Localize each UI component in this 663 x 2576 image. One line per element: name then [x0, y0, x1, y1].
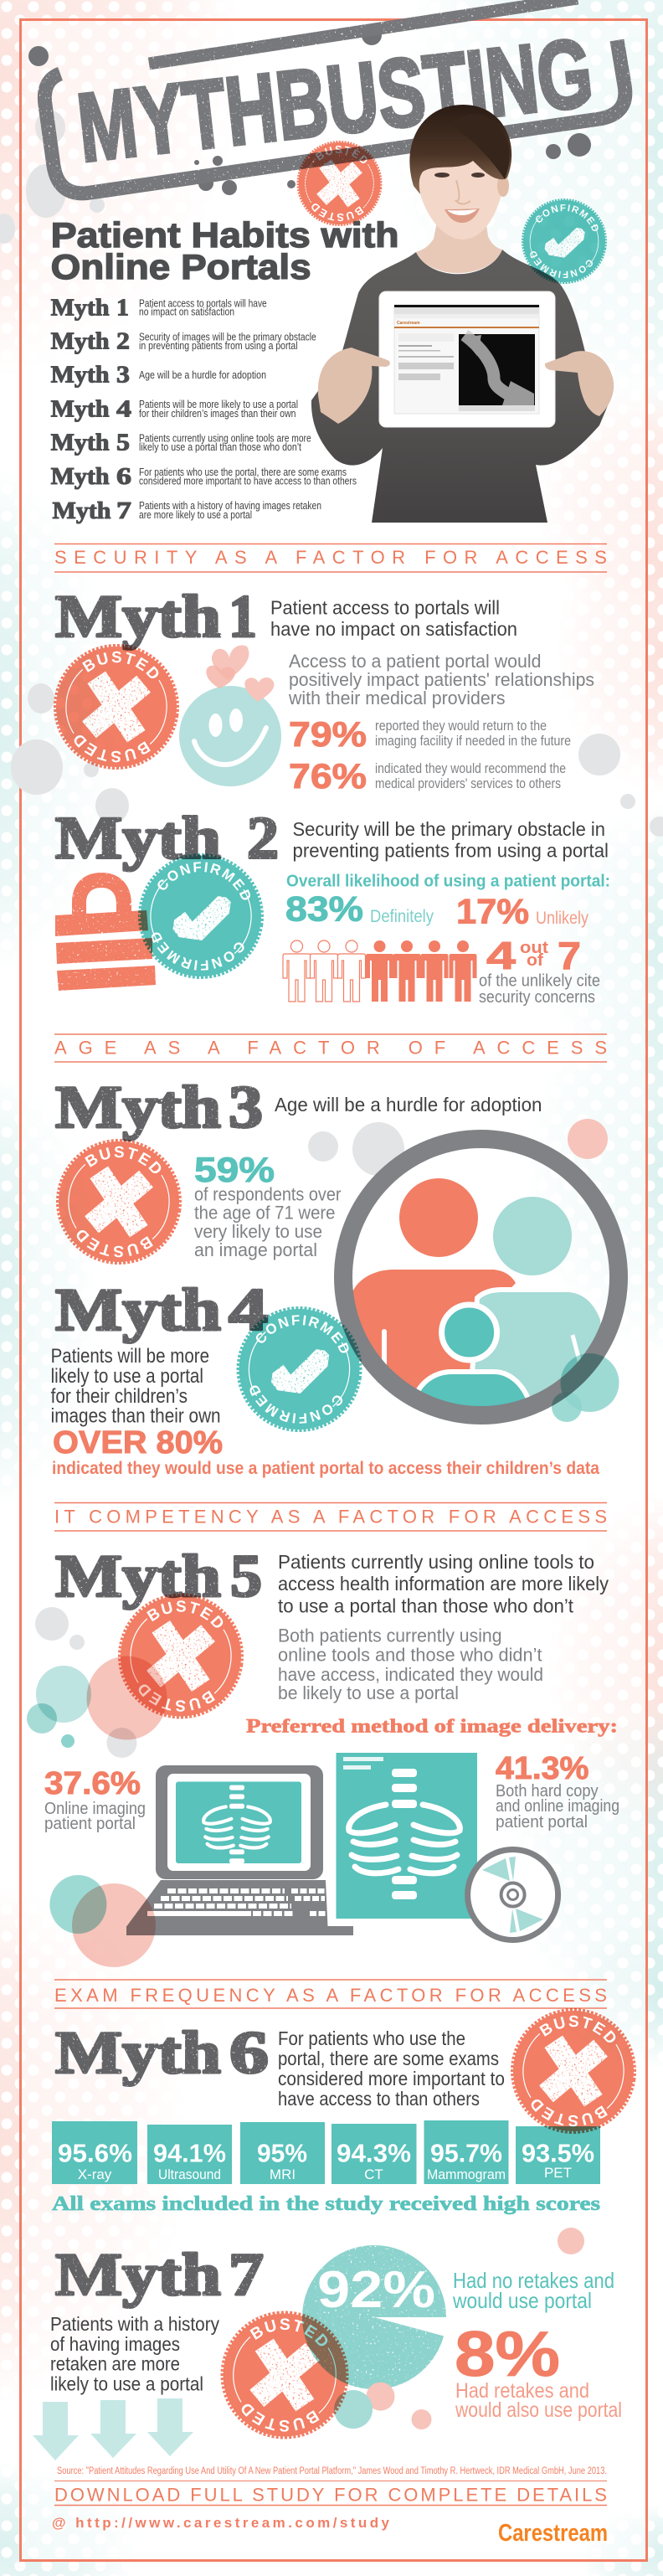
tile: ultrasound: 94.1%	[153, 2139, 226, 2167]
myth 5 statement: to use a portal than those who don’t	[278, 1595, 574, 1617]
myth 2	[55, 805, 610, 1007]
sweater	[311, 250, 613, 523]
teal parent	[493, 1197, 572, 1275]
tile: PET	[516, 2126, 600, 2184]
busted stamp: hero	[296, 141, 382, 226]
myth list: 1	[116, 294, 129, 321]
busted stamp: myth 7: BUSTED	[249, 2318, 328, 2347]
confirmed stamp: myth 2: CONFIRMED	[152, 933, 244, 971]
tile: CT	[332, 2124, 417, 2184]
stat: 41.3 percent: patient portal	[496, 1813, 588, 1832]
legend: no retakes: would use portal	[452, 2288, 592, 2313]
stat: 37.6 percent: Online imaging	[44, 1800, 146, 1818]
stat: 59 percent	[194, 1150, 342, 1260]
tile: mammogram: 95.7%	[430, 2139, 502, 2167]
stat: 59 percent: 59%	[194, 1150, 275, 1189]
stat: 4 out of 7: 7	[558, 934, 581, 977]
busted stamp: hero: BUSTED	[315, 146, 367, 163]
busted stamp: myth 1	[54, 644, 179, 770]
busted stamp: myth 1: BUSTED	[74, 735, 151, 762]
tablet screen	[394, 305, 539, 414]
myth 2 statement: Security will be the primary obstacle in	[293, 818, 605, 840]
myth list: 6	[116, 463, 131, 490]
stat: 59 percent: an image portal	[194, 1239, 317, 1260]
supporting paragraph: have access, indicated they would	[278, 1664, 543, 1685]
stat: over 80 percent	[52, 1425, 599, 1478]
stat: 8 percent: Had retakes and	[455, 2379, 589, 2403]
neck and chest	[416, 219, 502, 273]
myth 4 statement	[51, 1345, 221, 1428]
stat: 41.3 percent: Both hard copy	[496, 1782, 599, 1801]
myth 1 statement: have no impact on satisfaction	[270, 618, 517, 640]
myth 6 title: 6	[229, 2019, 269, 2086]
myth list: for their children’s images than their own	[139, 408, 296, 420]
myth 2 title	[55, 805, 279, 872]
myth 6 statement	[278, 2027, 505, 2110]
supporting paragraph	[288, 651, 594, 708]
exam score tiles	[52, 2120, 600, 2184]
busted stamp: myth 5	[118, 1593, 244, 1718]
busted stamp: myth 5: BUSTED	[146, 1600, 223, 1628]
busted stamp: myth 6: BUSTED	[539, 2015, 616, 2043]
eyes and brows	[434, 173, 450, 178]
busted stamp: myth 3: BUSTED	[77, 1230, 153, 1258]
busted stamp: myth 6	[511, 2008, 636, 2134]
stat: 4 out of 7: security concerns	[479, 988, 595, 1007]
myth 5 title: Myth	[55, 1543, 221, 1610]
stat: 4 out of 7: of	[527, 951, 543, 970]
tile: ultrasound: Ultrasound	[158, 2166, 221, 2182]
myth 2 statement	[293, 818, 609, 862]
myth 1 statement: Patient access to portals will	[270, 597, 500, 619]
bubbles	[334, 2228, 584, 2429]
myth 1 title: Myth	[55, 583, 221, 650]
stat: 83 percent: Definitely	[370, 907, 434, 926]
stat: 41.3 percent	[496, 1751, 619, 1832]
decorative grey blobs	[0, 25, 663, 837]
bubbles behind family	[308, 1119, 608, 1176]
footer call to action: DOWNLOAD FULL STUDY FOR COMPLETE DETAILS	[54, 2485, 607, 2506]
stat: 59 percent: the age of 71 were	[194, 1203, 335, 1224]
confirmed stamp: myth 4	[236, 1306, 362, 1432]
confirmed stamp: myth 2	[138, 853, 264, 979]
icon: family in magnifier circle	[335, 1139, 619, 1424]
stat: 59 percent: very likely to use	[194, 1221, 322, 1242]
heading: patient habits	[51, 215, 399, 286]
supporting paragraph: Both patients currently using	[278, 1625, 502, 1646]
confirmed stamp: hero	[522, 198, 607, 284]
myth 7 title	[55, 2241, 264, 2308]
supporting paragraph	[278, 1625, 543, 1703]
stat: 79 percent: imaging facility if needed in the future	[375, 733, 571, 749]
supporting paragraph: online tools and those who didn’t	[278, 1645, 542, 1666]
myth 7 statement: of having images	[50, 2333, 180, 2355]
myth 4 title: 4	[229, 1276, 268, 1343]
supporting paragraph: Access to a patient portal would	[289, 651, 541, 672]
hero woman holding tablet	[311, 105, 614, 523]
myth 4 title	[55, 1276, 268, 1343]
stat: 37.6 percent	[44, 1766, 146, 1833]
tile: PET: PET	[544, 2165, 572, 2181]
right hand	[545, 351, 614, 416]
stat: 37.6 percent: 37.6%	[44, 1766, 141, 1801]
myth 7 statement: likely to use a portal	[50, 2373, 203, 2395]
myth list: Myth	[51, 328, 110, 355]
myth 6 statement: considered more important to	[278, 2068, 505, 2089]
myth 6	[52, 2008, 636, 2215]
stat: 83 percent: 83%	[285, 889, 363, 929]
myth 6 statement: portal, there are some exams	[278, 2048, 499, 2069]
stat: 4 out of 7: out	[520, 939, 548, 957]
supporting paragraph: with their medical providers	[288, 688, 506, 708]
myth list: Patient access to portals will have	[139, 297, 267, 309]
busted stamp: myth 7	[221, 2311, 348, 2439]
myth list: considered more important to have access to than others	[139, 476, 357, 487]
myth 3 statement: Age will be a hurdle for adoption	[275, 1094, 542, 1115]
myth list: Myth	[51, 463, 110, 490]
icon: CD disc	[468, 1849, 558, 1940]
myth list: 7	[116, 497, 131, 524]
myth 5 bubbles	[27, 1607, 167, 1758]
myth 5 title	[55, 1543, 262, 1610]
stat: 4 out of 7	[479, 934, 600, 1007]
myth 1 title	[55, 583, 257, 650]
myth 5 statement: Patients currently using online tools to	[278, 1551, 594, 1573]
myth list: 3	[116, 362, 130, 389]
hair	[409, 105, 511, 194]
icon: padlock	[55, 873, 156, 991]
tile: mammogram: Mammogram	[427, 2166, 506, 2182]
stat: 17 percent: Unlikely	[536, 909, 588, 928]
tile: x-ray	[52, 2121, 137, 2184]
stat: over 80 percent: indicated they would use a patient portal to access their children’s data	[52, 1459, 599, 1478]
myth list: in preventing patients from using a portal	[139, 340, 298, 352]
myth 7 statement: Patients with a history	[50, 2313, 219, 2335]
myth 5 statement: access health information are more likely	[278, 1573, 609, 1595]
myth 1 title: 1	[229, 583, 257, 650]
myth list: 5	[116, 430, 130, 456]
heading: patient habits: Patient Habits with	[51, 215, 399, 255]
tile: CT: 94.3%	[337, 2139, 411, 2167]
busted stamp: myth 3	[56, 1139, 182, 1265]
study url: @ http://www.carestream.com/study	[52, 2515, 390, 2531]
supporting paragraph: be likely to use a portal	[278, 1682, 459, 1703]
heading: patient habits: Online Portals	[51, 247, 311, 286]
tile: CT: CT	[364, 2166, 383, 2182]
busted stamp: myth 7: BUSTED	[241, 2403, 320, 2432]
legend: no retakes	[452, 2268, 614, 2313]
section header: exam frequency: EXAM FREQUENCY AS A FACTOR FOR ACCESS	[54, 1985, 607, 2006]
confirmed stamp: myth 4: CONFIRMED	[249, 1385, 343, 1424]
myth list: Myth	[51, 294, 110, 321]
orange parent	[399, 1178, 478, 1257]
myth 5 title: 5	[230, 1543, 262, 1610]
myth 4 statement: images than their own	[51, 1405, 221, 1428]
stat: 41.3 percent: 41.3%	[496, 1751, 589, 1786]
tile: MRI: 95%	[257, 2139, 307, 2167]
confirmed stamp: myth 2: CONFIRMED	[157, 862, 250, 899]
confirmed stamp: hero: CONFIRMED	[536, 204, 599, 231]
myth 6 title	[55, 2019, 269, 2086]
myth 2 title: Myth	[55, 805, 221, 872]
stat: 76 percent	[289, 756, 566, 796]
myth 3 title: 3	[229, 1074, 263, 1141]
section header: IT competency: IT COMPETENCY AS A FACTOR FOR ACCESS	[54, 1507, 607, 1528]
myth 3 title: Myth	[55, 1074, 221, 1141]
tile: PET: 93.5%	[522, 2139, 594, 2167]
tile: MRI: MRI	[270, 2166, 296, 2182]
myth 1	[54, 583, 594, 796]
left hand	[318, 348, 390, 424]
myth 7 title: 7	[229, 2241, 264, 2308]
myth list: Myth	[51, 395, 110, 422]
myth list: Age will be a hurdle for adoption	[139, 369, 266, 381]
icon: x-ray film	[337, 1753, 477, 1919]
myth 4 title: Myth	[55, 1276, 221, 1343]
myth list: 2	[116, 328, 130, 355]
stat: 79 percent: reported they would return to the	[375, 718, 547, 734]
confirmed stamp: hero: CONFIRMED	[530, 251, 593, 278]
stat: 76 percent: indicated they would recommend the	[375, 760, 566, 776]
myth 7 title: Myth	[55, 2241, 221, 2308]
myth list	[51, 294, 357, 524]
nose	[456, 180, 470, 204]
myth list: are more likely to use a portal	[139, 509, 252, 521]
busted stamp: myth 5: BUSTED	[139, 1685, 215, 1712]
myth 5	[44, 1543, 619, 1967]
mouth	[445, 209, 480, 223]
busted stamp: hero: BUSTED	[311, 204, 363, 221]
myth 6 statement: For patients who use the	[278, 2027, 465, 2049]
myth 4 statement: for their children’s	[51, 1385, 188, 1408]
bubble over laptop	[72, 1883, 156, 1967]
myth 5 statement	[278, 1551, 609, 1617]
people icons: 3 outline, 4 solid	[283, 940, 477, 1002]
busted stamp: myth 3: BUSTED	[85, 1146, 161, 1173]
tile: mammogram	[424, 2120, 509, 2184]
myth list: Myth	[51, 362, 110, 389]
stat: 4 out of 7: of the unlikely cite	[479, 971, 600, 990]
stat: 41.3 percent: and online imaging	[496, 1797, 619, 1816]
stat: 76 percent: medical providers' services to others	[375, 775, 561, 791]
icon: smiley with hearts	[179, 646, 281, 786]
child	[416, 1369, 530, 1406]
busted stamp: myth 6: BUSTED	[531, 2099, 608, 2127]
confirmed stamp: myth 4: CONFIRMED	[256, 1315, 348, 1353]
myth 6 title: Myth	[55, 2019, 221, 2086]
myth 4	[50, 1276, 599, 1478]
myth 7 statement	[50, 2313, 219, 2395]
face	[416, 131, 506, 240]
pie chart: 92 and 8 percent: 92%	[317, 2261, 435, 2319]
stat: 83 percent	[285, 889, 434, 929]
stat: 79 percent: 79%	[289, 714, 367, 754]
myth list: Patients will be more likely to use a portal	[139, 399, 298, 410]
myth 4 statement: likely to use a portal	[51, 1365, 203, 1388]
stat: 76 percent: 76%	[289, 756, 367, 796]
down arrows	[33, 2398, 193, 2460]
tile: MRI	[240, 2122, 325, 2184]
tablet screen: Carestream	[397, 321, 420, 326]
tablet	[379, 291, 555, 427]
bubbles over family	[552, 1353, 619, 1422]
tile: x-ray: 95.6%	[58, 2139, 132, 2167]
myth 4 statement: Patients will be more	[51, 1345, 209, 1368]
stat: over 80 percent: OVER 80%	[53, 1425, 223, 1461]
likelihood heading: Overall likelihood of using a patient portal:	[286, 873, 610, 891]
stat: 59 percent: of respondents over	[194, 1184, 342, 1205]
myth list: Patients currently using online tools are more	[139, 432, 311, 444]
myth 7	[33, 2228, 622, 2460]
pie chart: 92 and 8 percent	[302, 2245, 448, 2389]
stat: 79 percent	[289, 714, 571, 754]
bubble behind laptop	[49, 1875, 106, 1934]
preferred delivery heading: Preferred method of image delivery:	[246, 1716, 618, 1737]
tile: ultrasound	[147, 2125, 232, 2184]
myth 3 title	[55, 1074, 263, 1141]
section header: age: AGE AS A FACTOR OF ACCESS	[54, 1038, 607, 1059]
Carestream logo: Carestream	[498, 2520, 608, 2547]
myth list: likely to use a portal than those who don’t	[139, 441, 301, 453]
myth 2 statement: preventing patients from using a portal	[293, 840, 609, 862]
tile: x-ray: X-ray	[78, 2166, 112, 2182]
icon: laptop with x-ray	[126, 1765, 353, 1935]
stat: 37.6 percent: patient portal	[44, 1815, 136, 1833]
busted stamp: myth 1: BUSTED	[82, 652, 159, 678]
myth 6 statement: have access to than others	[278, 2088, 480, 2110]
stat: 8 percent: would also use portal	[455, 2398, 622, 2422]
ear	[497, 175, 509, 197]
myth 7 statement: retaken are more	[50, 2353, 180, 2375]
stat: 8 percent	[455, 2319, 622, 2422]
stat: 4 out of 7: 4	[486, 934, 517, 977]
myth list: 4	[116, 395, 131, 422]
exams note: All exams included in the study received high scores	[52, 2193, 600, 2215]
myth list: Patients with a history of having images retaken	[139, 500, 321, 512]
myth list: Security of images will be the primary obstacle	[139, 331, 316, 343]
myth 3	[55, 1074, 542, 1265]
stat: 17 percent	[456, 891, 588, 931]
stat: 8 percent: 8%	[455, 2319, 560, 2390]
stat: 17 percent: 17%	[456, 891, 529, 931]
myth list: no impact on satisfaction	[139, 306, 234, 317]
myth list: For patients who use the portal, there are some exams	[139, 466, 347, 478]
myth 1 statement	[270, 597, 517, 640]
section header: security: SECURITY AS A FACTOR FOR ACCESS	[54, 547, 607, 568]
legend: no retakes: Had no retakes and	[453, 2268, 614, 2293]
supporting paragraph: positively impact patients' relationships	[289, 669, 594, 690]
myth 2 title: 2	[247, 805, 279, 872]
myth list: Myth	[52, 497, 110, 524]
myth list: Myth	[51, 430, 110, 456]
